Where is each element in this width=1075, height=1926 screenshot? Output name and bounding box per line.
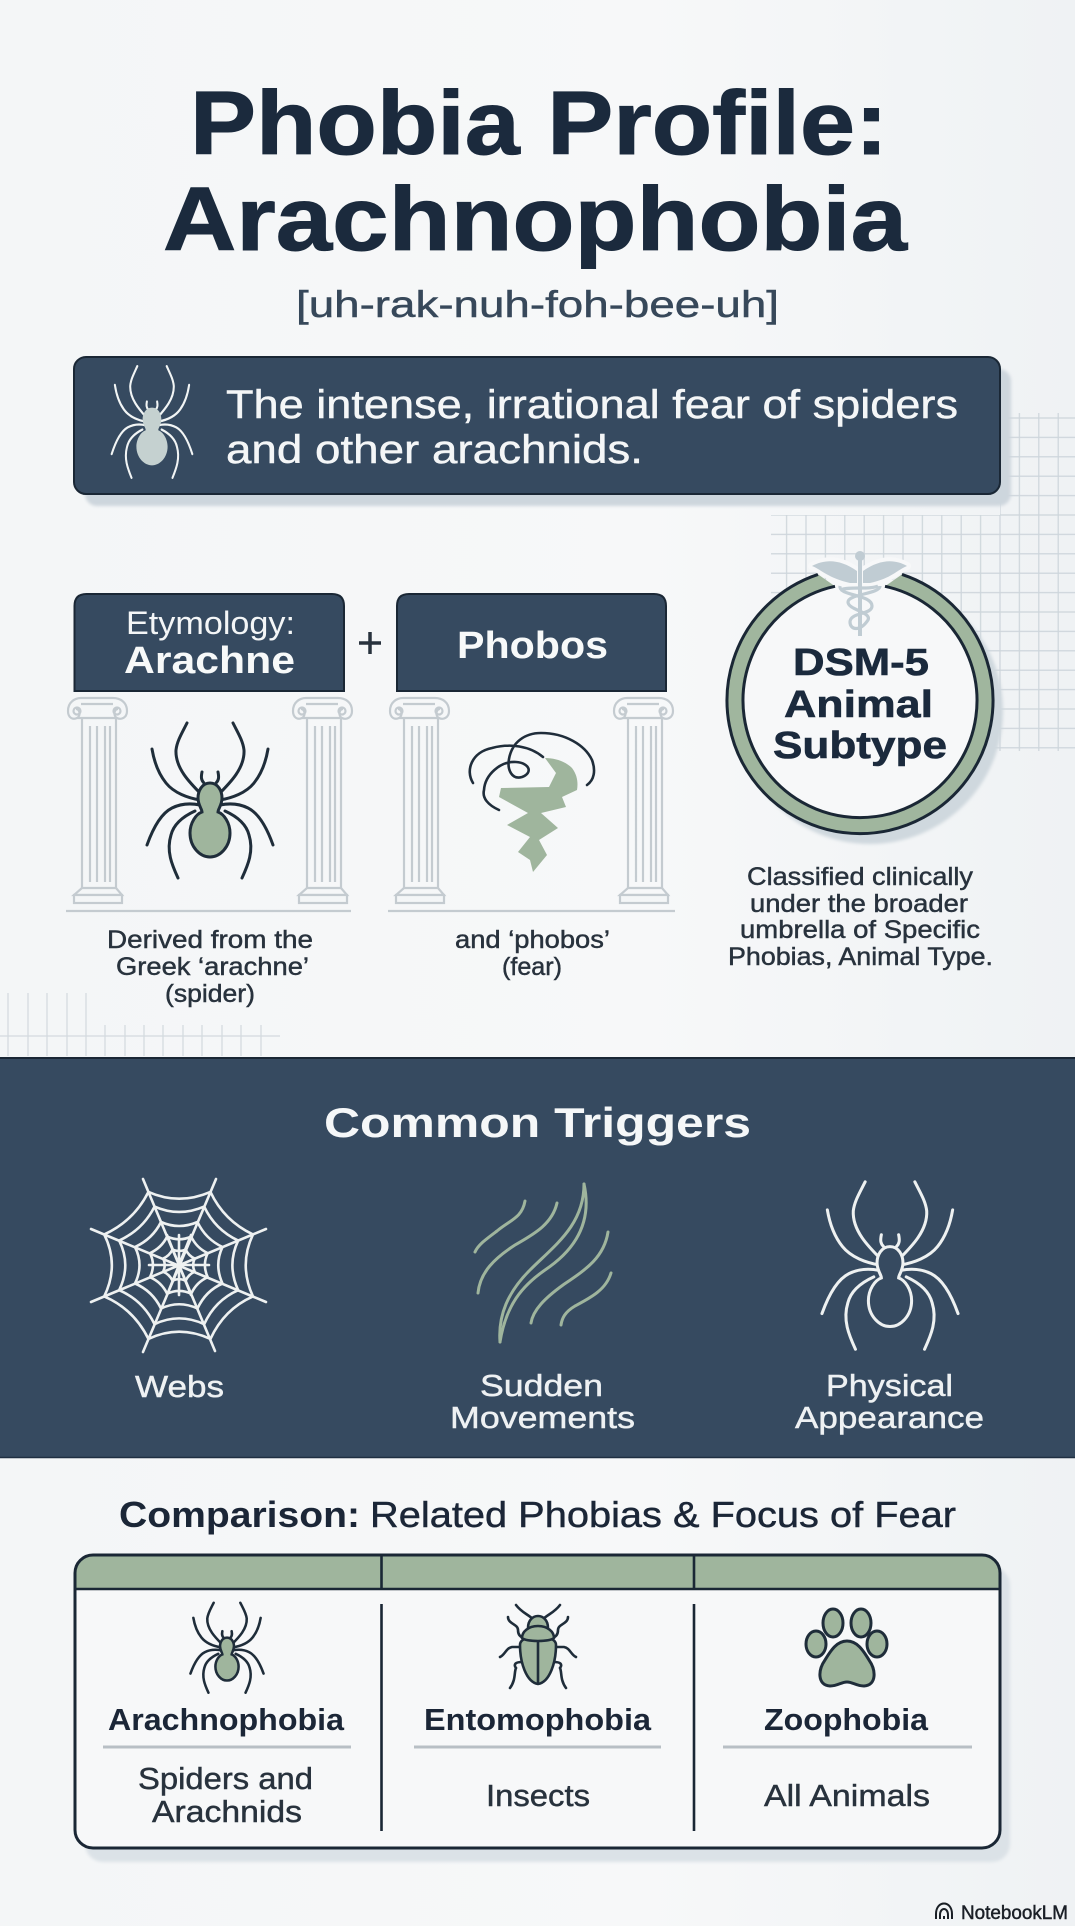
icon: fear swirl	[470, 733, 594, 872]
icon: beetle	[500, 1605, 576, 1688]
column: entomophobia: Entomophobia	[424, 1702, 652, 1737]
icon: spider	[190, 1603, 264, 1693]
panel: Arachne etymology	[66, 594, 352, 1008]
caption: (spider)	[165, 980, 255, 1008]
badge label: DSM-5	[793, 642, 929, 684]
trigger: sudden movements: Sudden	[480, 1368, 603, 1403]
panel: Phobos etymology	[388, 594, 675, 981]
badge label	[773, 642, 947, 767]
badge ring	[727, 574, 1003, 844]
title: Arachnophobia	[163, 170, 908, 270]
column: entomophobia: Insects	[486, 1778, 590, 1813]
caption	[728, 863, 993, 971]
definition text: and other arachnids.	[226, 428, 643, 472]
icon: outlined spider	[822, 1182, 958, 1349]
trigger: sudden movements: Movements	[450, 1400, 635, 1435]
caption: umbrella of Specific	[740, 916, 980, 944]
heading box: Etymology Arachne	[74, 594, 344, 691]
icon: caduceus	[812, 551, 907, 636]
column: zoophobia: Zoophobia	[764, 1702, 929, 1737]
trigger: webs: Webs	[135, 1369, 224, 1404]
caption: (fear)	[502, 953, 562, 981]
trigger: webs	[91, 1179, 266, 1404]
column: arachnophobia: Arachnids	[152, 1794, 302, 1829]
caption: and ‘phobos’	[455, 926, 610, 954]
caption: Classified clinically	[747, 863, 974, 891]
title	[163, 74, 908, 270]
watermark: NotebookLM: NotebookLM	[961, 1903, 1068, 1924]
title: Phobia Profile:	[190, 74, 888, 174]
heading box: Etymology Arachne: Arachne	[124, 640, 295, 682]
panel: definition banner	[74, 357, 1011, 506]
icon: spider web	[91, 1179, 266, 1352]
icon: motion lines	[475, 1184, 611, 1342]
comparison heading: Related Phobias & Focus of Fear	[370, 1494, 956, 1535]
column: arachnophobia: Spiders and	[138, 1761, 313, 1796]
heading box: Phobos	[397, 594, 666, 691]
caption	[455, 926, 610, 981]
panel: common triggers	[0, 1058, 1075, 1458]
trigger: sudden movements	[450, 1184, 635, 1435]
trigger: physical appearance: Appearance	[795, 1400, 984, 1435]
icon: paw print	[806, 1609, 887, 1686]
pronunciation: [uh-rak-nuh-foh-bee-uh]	[296, 284, 779, 325]
caption: under the broader	[750, 890, 968, 918]
trigger: physical appearance	[795, 1182, 984, 1435]
table frame	[75, 1555, 1010, 1862]
column: zoophobia	[723, 1609, 972, 1813]
panel: comparison table	[75, 1555, 1010, 1862]
icon: green spider	[147, 723, 273, 878]
icon: pale spider	[112, 366, 192, 478]
trigger: physical appearance: Physical	[826, 1368, 953, 1403]
caption: Derived from the	[107, 926, 313, 954]
heading box: Phobos: Phobos	[457, 625, 608, 667]
heading: Common Triggers	[324, 1099, 751, 1146]
comparison heading: Comparison:	[119, 1494, 360, 1535]
heading box: Etymology Arachne: Etymology:	[126, 605, 295, 641]
caption: Greek ‘arachne’	[116, 953, 309, 981]
column: arachnophobia: Arachnophobia	[108, 1702, 345, 1737]
caption: Phobias, Animal Type.	[728, 943, 993, 971]
panel: DSM-5 badge	[727, 551, 1003, 971]
columns	[66, 698, 352, 911]
definition text: The intense, irrational fear of spiders	[226, 383, 958, 427]
comparison heading	[119, 1494, 956, 1535]
badge label: Animal	[784, 684, 933, 726]
columns	[388, 698, 675, 911]
icon: plus sign	[359, 632, 381, 654]
caption	[107, 926, 313, 1008]
column: arachnophobia	[103, 1603, 351, 1829]
badge label: Subtype	[773, 725, 947, 767]
column: entomophobia	[414, 1605, 661, 1813]
definition text	[226, 383, 958, 472]
column: zoophobia: All Animals	[764, 1778, 930, 1813]
